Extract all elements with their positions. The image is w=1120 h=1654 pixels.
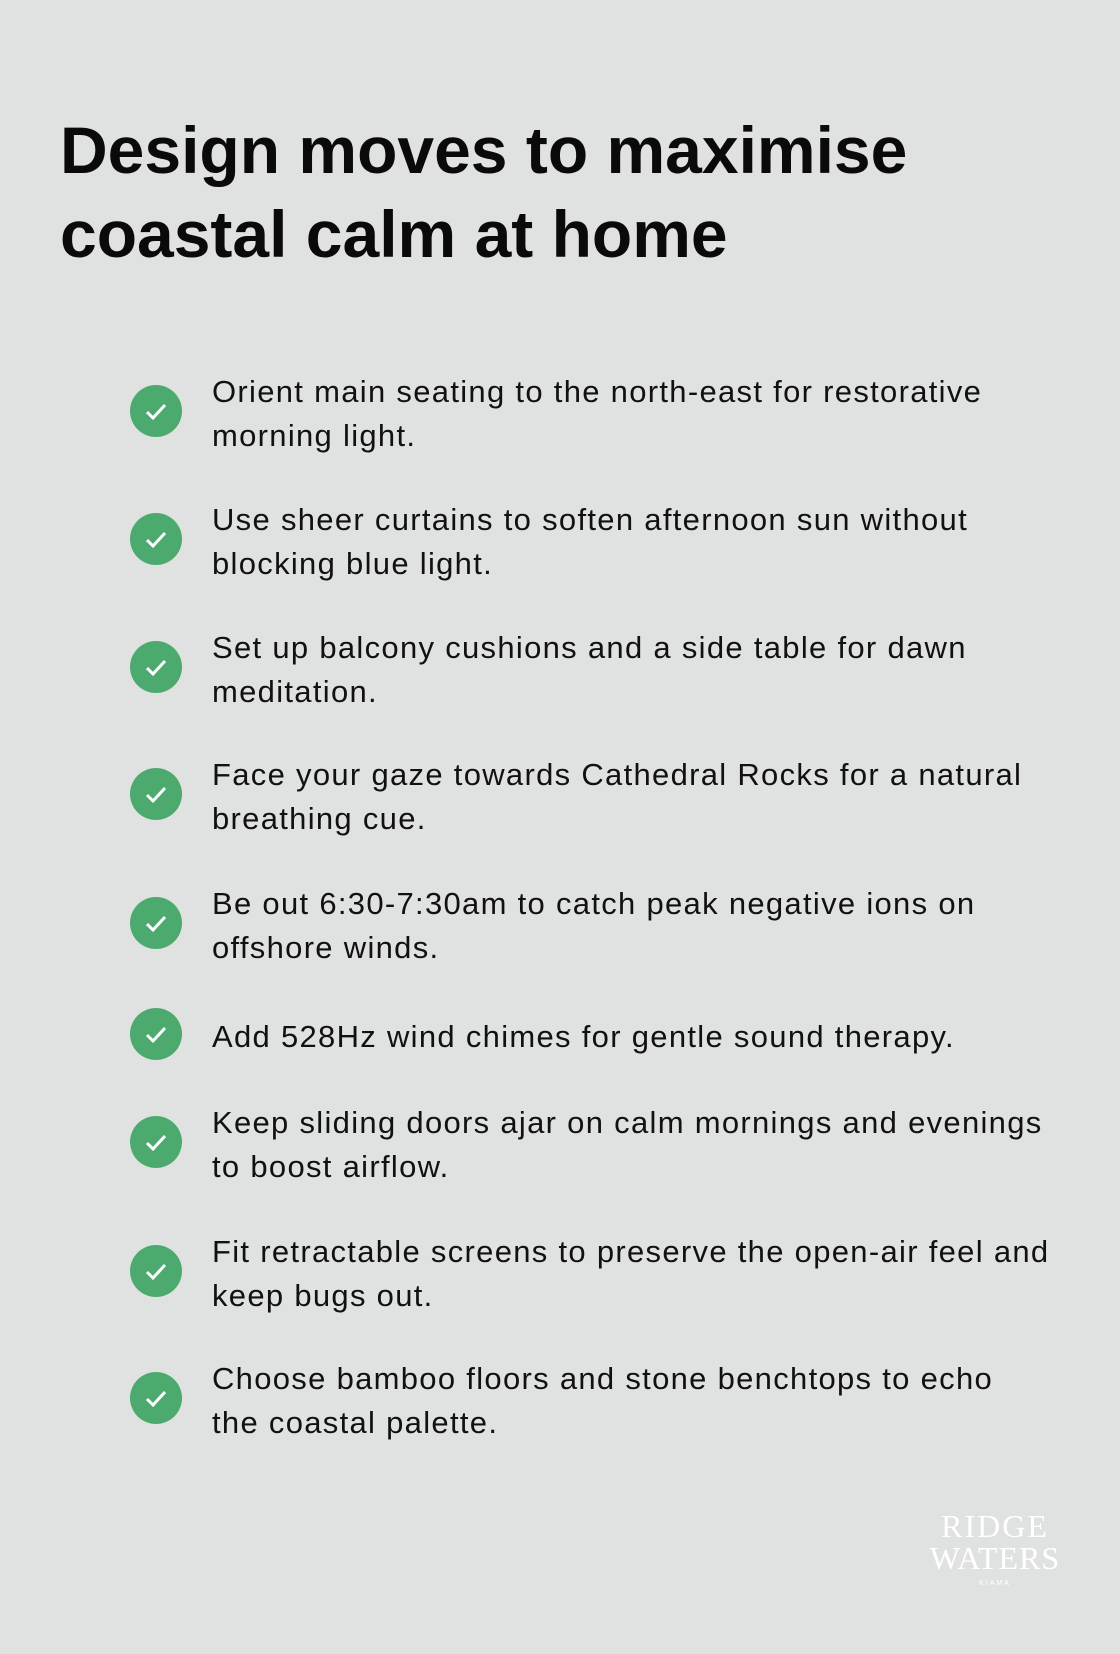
text 8: Fit retractable screens to preserve the open-air feel and bbox=[212, 1234, 1049, 1269]
text 4: breathing cue. bbox=[212, 801, 427, 836]
logo: RIDGE bbox=[941, 1508, 1049, 1544]
icon: check bbox=[130, 1008, 182, 1060]
text 7: Keep sliding doors ajar on calm mornings and evenings bbox=[212, 1105, 1043, 1140]
text 4 bbox=[212, 757, 1022, 836]
text 2: Use sheer curtains to soften afternoon sun without bbox=[212, 502, 968, 537]
text 7: to boost airflow. bbox=[212, 1149, 450, 1184]
text 1: morning light. bbox=[212, 418, 416, 453]
item 2 bbox=[130, 502, 968, 581]
text 9 bbox=[212, 1361, 993, 1440]
text 9: Choose bamboo floors and stone benchtops to echo bbox=[212, 1361, 993, 1396]
text 5 bbox=[212, 886, 975, 965]
item 4 bbox=[130, 757, 1022, 836]
item 3 bbox=[130, 630, 967, 709]
icon: check bbox=[130, 1116, 182, 1168]
item 9 bbox=[130, 1361, 993, 1440]
text 5: Be out 6:30-7:30am to catch peak negative ions on bbox=[212, 886, 975, 921]
text 5: offshore winds. bbox=[212, 930, 439, 965]
item 8 bbox=[130, 1234, 1049, 1313]
text 1: Orient main seating to the north-east for restorative bbox=[212, 374, 982, 409]
item 5 bbox=[130, 886, 975, 965]
text 7 bbox=[212, 1105, 1043, 1184]
text 3: meditation. bbox=[212, 674, 378, 709]
icon: check bbox=[130, 1372, 182, 1424]
icon: check bbox=[130, 768, 182, 820]
title: Design moves to maximise bbox=[60, 113, 907, 187]
text 3: Set up balcony cushions and a side table for dawn bbox=[212, 630, 967, 665]
title: coastal calm at home bbox=[60, 197, 728, 271]
text 8: keep bugs out. bbox=[212, 1278, 434, 1313]
text 3 bbox=[212, 630, 967, 709]
text 2 bbox=[212, 502, 968, 581]
logo: KIAMA bbox=[979, 1580, 1011, 1587]
item 7 bbox=[130, 1105, 1043, 1184]
text 2: blocking blue light. bbox=[212, 546, 493, 581]
text 6: Add 528Hz wind chimes for gentle sound therapy. bbox=[212, 1019, 955, 1054]
text 1 bbox=[212, 374, 982, 453]
text 8 bbox=[212, 1234, 1049, 1313]
icon: check bbox=[130, 897, 182, 949]
icon: check bbox=[130, 513, 182, 565]
title bbox=[60, 113, 907, 271]
icon: check bbox=[130, 385, 182, 437]
item 6 bbox=[130, 1008, 955, 1060]
icon: check bbox=[130, 1245, 182, 1297]
text 4: Face your gaze towards Cathedral Rocks for a natural bbox=[212, 757, 1022, 792]
logo: WATERS bbox=[930, 1540, 1060, 1576]
logo bbox=[930, 1508, 1060, 1587]
text 9: the coastal palette. bbox=[212, 1405, 498, 1440]
item 1 bbox=[130, 374, 982, 453]
icon: check bbox=[130, 641, 182, 693]
